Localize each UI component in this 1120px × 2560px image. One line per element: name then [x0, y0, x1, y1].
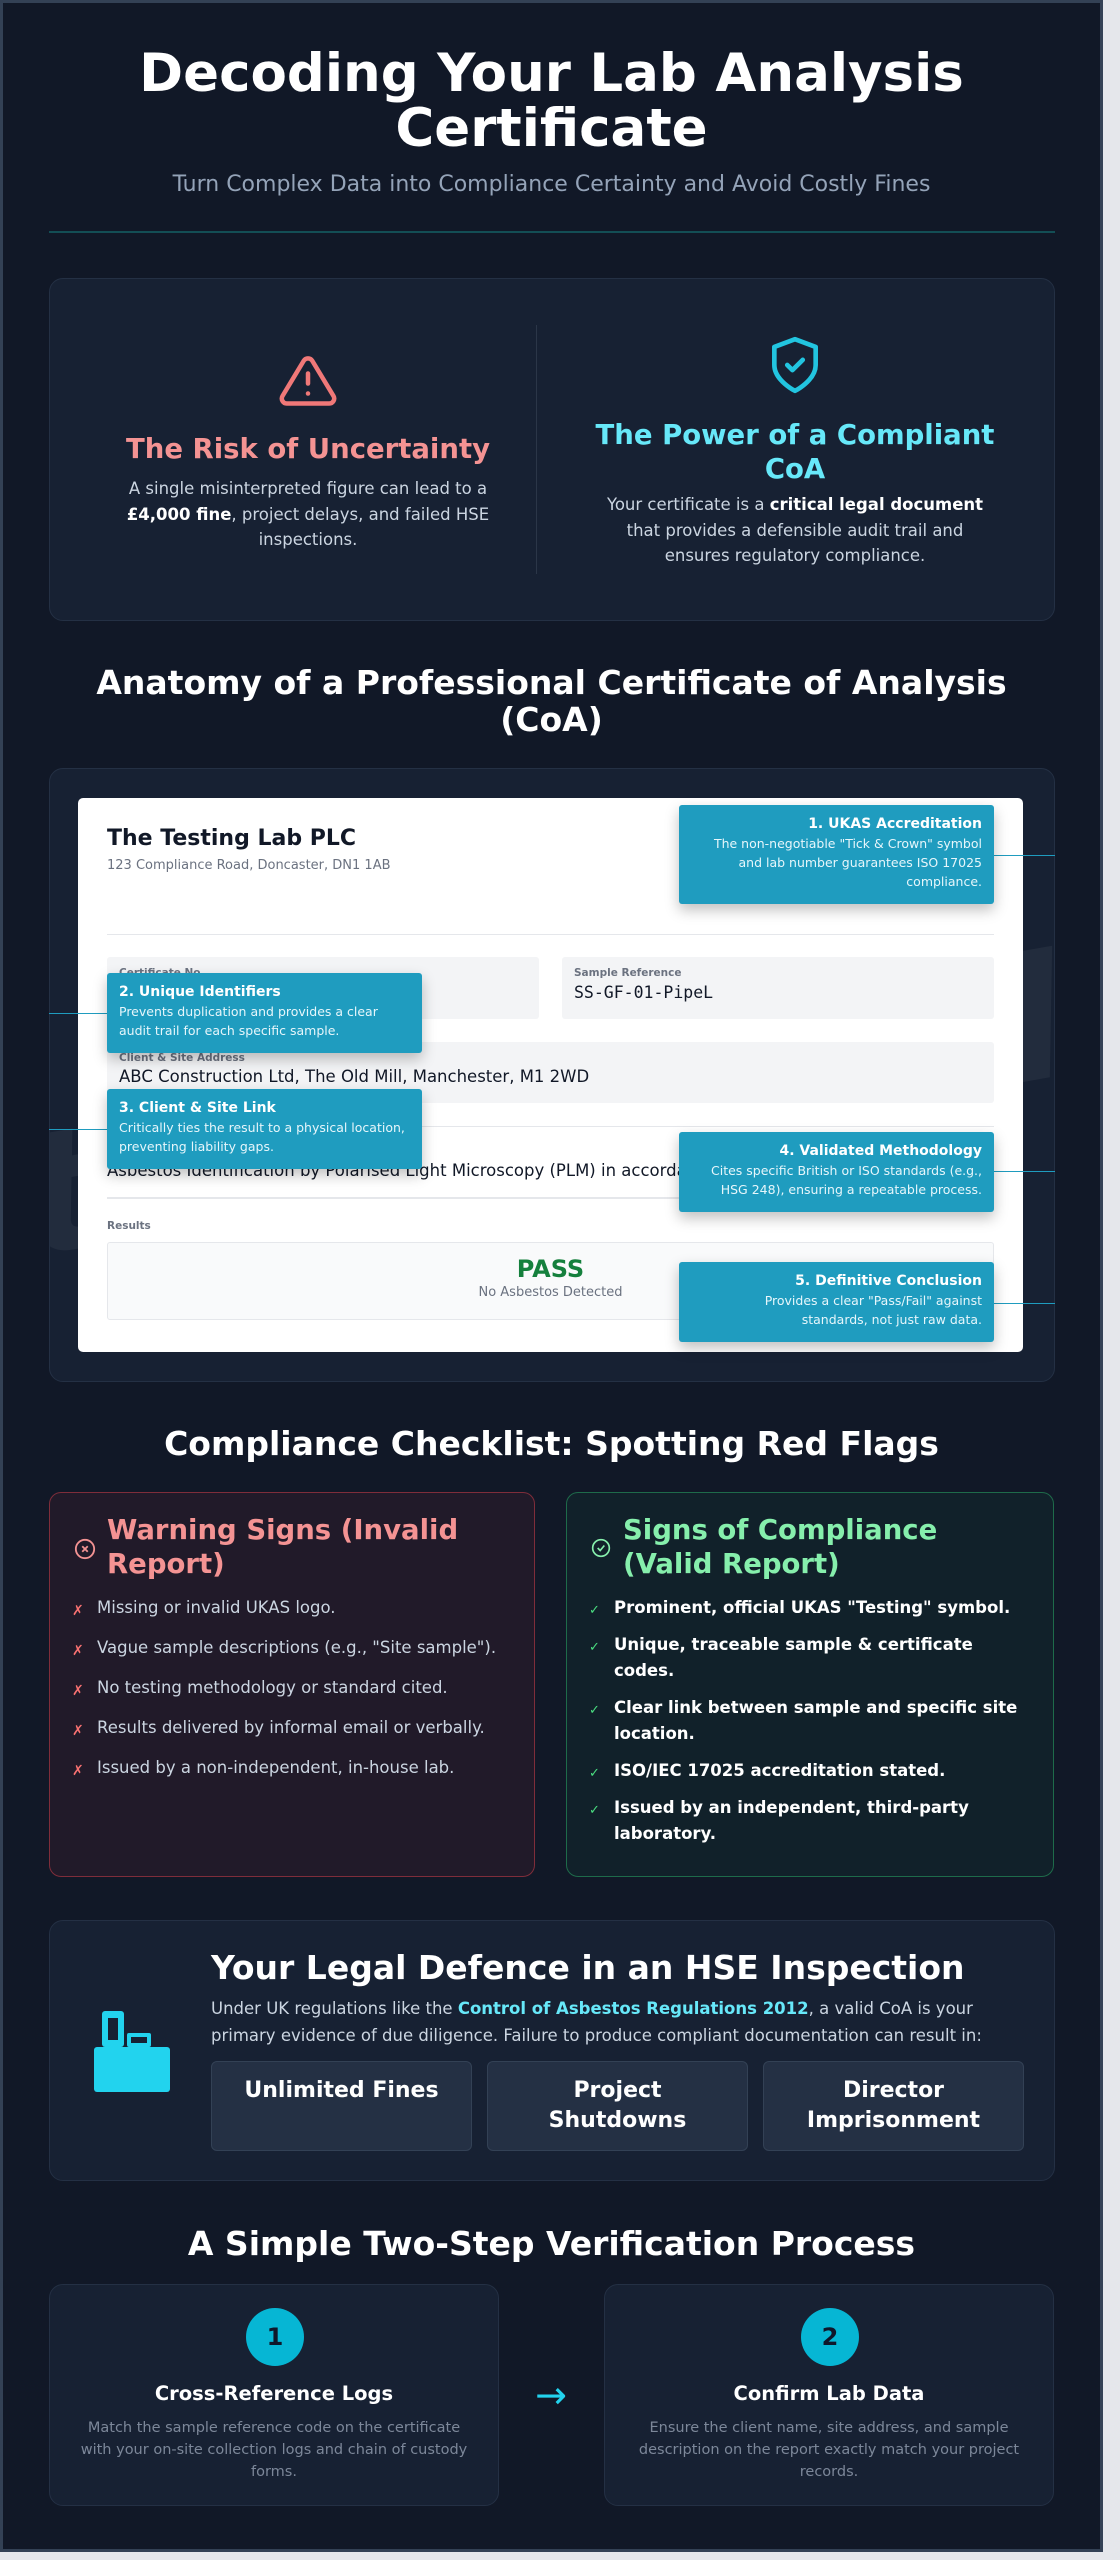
field: sample ref [562, 957, 994, 1019]
results box [107, 1242, 994, 1320]
field: certificate no [107, 957, 539, 1019]
list: compliance: Prominent, official UKAS "Testing" symbol. [614, 1598, 1010, 1617]
heading: two-step: A Simple Two-Step Verification Process [188, 2224, 915, 2263]
certificate mockup [78, 798, 1023, 1352]
step 2: Ensure the client name, site address, and sample description on the report exactly match your project records. [639, 2420, 1019, 2480]
box: shutdowns: Project [573, 2078, 662, 2103]
callout 5: 5. Definitive Conclusion [795, 1273, 982, 1289]
list: warning: Vague sample descriptions (e.g., "Site sample"). [97, 1638, 496, 1657]
lab name: The Testing Lab PLC [107, 826, 356, 851]
callout 4: 4. Validated Methodology [779, 1143, 982, 1159]
step 2: 2 [822, 2323, 838, 2351]
panel: risk vs power [49, 278, 1055, 621]
callout 2: Prevents duplication and provides a clear audit trail for each specific sample. [119, 1004, 378, 1038]
list: warning: Results delivered by informal email or verbally. [97, 1718, 485, 1737]
step 1: 1 [267, 2323, 283, 2351]
heading: checklist: Compliance Checklist: Spotting Red Flags [164, 1424, 939, 1463]
field: certificate no: TTL-2024-0871 [119, 983, 244, 1002]
heading: compliance: (Valid Report) [623, 1548, 840, 1580]
panel: anatomy [49, 768, 1055, 1382]
arrow: → [535, 2373, 567, 2417]
title: Decoding Your Lab Analysis [139, 43, 964, 104]
field: client [107, 1042, 994, 1103]
callout 1: 1. UKAS Accreditation [808, 816, 982, 832]
heading: power: CoA [765, 453, 825, 485]
list: compliance [591, 1598, 1017, 1843]
heading: power: The Power of a Compliant [596, 419, 994, 451]
callout 3 [107, 1089, 422, 1169]
heading: risk: The Risk of Uncertainty [126, 433, 490, 465]
field: client: ABC Construction Ltd, The Old Mill, Manchester, M1 2WD [119, 1067, 589, 1086]
UKAS logo: 1234 [949, 880, 977, 891]
panel: compliance signs [566, 1492, 1054, 1877]
list: compliance: ISO/IEC 17025 accreditation stated. [614, 1761, 945, 1780]
icon: x circle [74, 1538, 96, 1560]
box: fines [211, 2061, 472, 2151]
step 1: Match the sample reference code on the certificate with your on-site collection logs and chain of custody forms. [81, 2420, 467, 2480]
step 1: Cross-Reference Logs [155, 2382, 393, 2405]
callout 1 [679, 805, 994, 904]
callout 1: The non-negotiable "Tick & Crown" symbol and lab number guarantees ISO 17025 compliance. [714, 836, 982, 889]
list: warning [74, 1598, 496, 1777]
heading: warning [107, 1514, 458, 1580]
panel: legal defence [49, 1920, 1055, 2181]
heading: compliance [623, 1514, 937, 1580]
icon: legal [94, 2011, 170, 2092]
box: imprisonment: Director [843, 2078, 944, 2103]
icon: shield check [772, 336, 818, 394]
heading: warning: Warning Signs (Invalid [107, 1514, 458, 1546]
list: compliance: Clear link between sample and specific site location. [614, 1698, 1017, 1743]
box: shutdowns [487, 2061, 748, 2151]
heading: anatomy: (CoA) [500, 700, 603, 739]
field: sample ref: Sample Reference [574, 967, 682, 979]
field: method [107, 1138, 834, 1180]
UKAS logo: TESTING [941, 870, 985, 880]
callout 3: 3. Client & Site Link [119, 1100, 276, 1116]
lab address: 123 Compliance Road, Doncaster, DN1 1AB [107, 858, 390, 873]
list: warning: Issued by a non-independent, in-house lab. [97, 1758, 454, 1777]
field: client: Client & Site Address [119, 1052, 245, 1064]
callout 4: Cites specific British or ISO standards (e.g., HSG 248), ensuring a repeatable process. [711, 1163, 982, 1197]
results label: Results [107, 1220, 151, 1232]
heading: compliance: Signs of Compliance [623, 1514, 937, 1546]
list: compliance: Unique, traceable sample & certificate codes. [614, 1635, 973, 1680]
results box: PASS [517, 1255, 584, 1283]
text: legal: Under UK regulations like the Control of Asbestos Regulations 2012, a valid CoA is your primary evidence of due diligence. Failure to produce compliant documentation can result in: [211, 1999, 982, 2045]
heading: anatomy [96, 663, 1007, 739]
callout 2 [107, 973, 422, 1053]
box: imprisonment [763, 2061, 1024, 2151]
heading: anatomy: Anatomy of a Professional Certificate of Analysis [96, 663, 1007, 702]
icon: check circle [592, 1538, 610, 1558]
field: certificate no: Certificate No. [119, 967, 205, 979]
UKAS logo [923, 826, 1003, 891]
callout 2: 2. Unique Identifiers [119, 984, 281, 1000]
results box: No Asbestos Detected [478, 1285, 623, 1300]
subtitle: Turn Complex Data into Compliance Certainty and Avoid Costly Fines [173, 172, 930, 197]
box: fines: Unlimited Fines [244, 2078, 439, 2103]
text: risk: A single misinterpreted figure can lead to a £4,000 fine, project delays, and failed HSE inspections. [127, 479, 489, 549]
title [139, 43, 964, 159]
icon: warning triangle [280, 356, 336, 406]
panel: warning signs [49, 1492, 535, 1877]
list: compliance: Issued by an independent, third-party laboratory. [614, 1798, 969, 1843]
heading: legal: Your Legal Defence in an HSE Inspection [211, 1948, 965, 1987]
box: shutdowns: Shutdowns [549, 2108, 686, 2133]
heading: warning: Report) [107, 1548, 225, 1580]
step 2 [604, 2284, 1054, 2506]
field: method: Asbestos Identification by Polarised Light Microscopy (PLM) in accordance with HSG 248 [107, 1161, 834, 1180]
step 2: Confirm Lab Data [734, 2382, 924, 2405]
field: method: Method [107, 1138, 152, 1150]
callout 5 [679, 1262, 994, 1342]
callout 4 [679, 1132, 994, 1212]
text: power: Your certificate is a critical legal document that provides a defensible audit trail and ensures regulatory compliance. [607, 495, 983, 565]
step 1 [49, 2284, 499, 2506]
callout 3: Critically ties the result to a physical location, preventing liability gaps. [119, 1120, 405, 1154]
heading: power [596, 419, 994, 485]
box: imprisonment: Imprisonment [807, 2108, 980, 2133]
callout 5: Provides a clear "Pass/Fail" against standards, not just raw data. [765, 1293, 982, 1327]
list: warning: No testing methodology or standard cited. [97, 1678, 448, 1697]
title: Certificate [395, 98, 708, 159]
field: sample ref: SS-GF-01-PipeL [574, 983, 713, 1002]
list: warning: Missing or invalid UKAS logo. [97, 1598, 336, 1617]
